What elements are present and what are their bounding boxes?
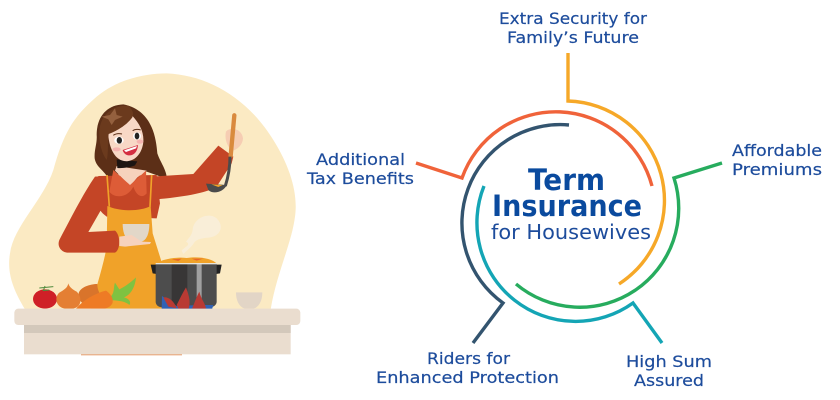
label: additional tax benefits: Tax Benefits [306, 169, 414, 188]
apron straps [107, 175, 152, 207]
blue flames [162, 296, 213, 309]
ladle soup [211, 184, 223, 187]
carrot [76, 277, 136, 309]
soup [157, 257, 217, 263]
left arm [59, 176, 119, 253]
carrot leaves [110, 277, 136, 305]
back onion [79, 284, 100, 305]
counter underside strip [81, 353, 182, 355]
center title [491, 163, 651, 244]
raised hand [225, 129, 243, 151]
arc: riders [462, 125, 569, 343]
onions [56, 283, 100, 309]
apron [91, 206, 164, 309]
mouth [123, 145, 138, 155]
label: affordable premiums [732, 141, 822, 179]
background blob [9, 73, 296, 309]
label: riders: Enhanced Protection [376, 368, 559, 387]
soup spots [172, 259, 203, 261]
eyes [117, 133, 139, 144]
diagram: ring of five arcs [416, 53, 722, 343]
right arm [152, 146, 233, 199]
neck [115, 166, 147, 186]
pot shadow band [172, 264, 187, 307]
label: extra security: Extra Security for [499, 9, 647, 28]
counter [14, 309, 300, 355]
ladle bowl [206, 184, 227, 192]
label: additional tax benefits: Additional [316, 150, 405, 169]
holding hand [119, 235, 151, 247]
label: extra security [499, 9, 647, 47]
label: high sum assured: High Sum [626, 352, 712, 371]
eye whites [114, 132, 141, 144]
choker shadow [117, 159, 137, 168]
pot handles [151, 265, 222, 274]
ladle stem [225, 157, 230, 186]
back hair [95, 104, 167, 196]
held bowl [123, 224, 149, 242]
label: riders [376, 349, 559, 387]
eyebrows [113, 129, 141, 135]
hair highlight [102, 108, 123, 125]
cooking pot [151, 257, 222, 309]
arc: affordable premiums [516, 163, 722, 307]
counter shadow [24, 325, 291, 333]
collar [109, 170, 147, 196]
sweater torso [97, 175, 160, 218]
pot highlight [197, 264, 202, 307]
label: extra security: Family’s Future [507, 28, 639, 47]
subtitle: for Housewives [491, 220, 651, 244]
label: additional tax benefits [306, 150, 414, 188]
arc: high sum assured [477, 186, 662, 343]
tomato body [33, 289, 57, 309]
steam [182, 216, 221, 254]
label: affordable premiums: Affordable [732, 141, 822, 160]
red flames [163, 287, 206, 309]
title line: Term: Term [528, 163, 605, 197]
cheeks [113, 140, 143, 151]
title line: Insurance: Insurance [492, 189, 642, 223]
face [108, 115, 143, 161]
carrot body [76, 291, 113, 309]
arc: additional tax benefits [416, 112, 652, 186]
label: riders: Riders for [427, 349, 510, 368]
illustration: woman cooking [9, 73, 300, 355]
counter base [24, 325, 291, 354]
teeth [124, 146, 137, 152]
front onion [56, 283, 80, 309]
arc: extra security [568, 53, 664, 284]
front hair [99, 106, 133, 160]
tomato stem [39, 286, 53, 291]
tomato [33, 286, 57, 309]
pot body [156, 264, 217, 307]
ladle [206, 115, 234, 192]
counter top [14, 309, 300, 325]
ladle handle [231, 115, 234, 156]
pot rim [156, 263, 217, 264]
label: high sum assured: Assured [634, 371, 704, 390]
label: high sum assured [626, 352, 712, 390]
empty bowl [236, 292, 262, 309]
woman [59, 104, 243, 309]
label: affordable premiums: Premiums [732, 160, 822, 179]
